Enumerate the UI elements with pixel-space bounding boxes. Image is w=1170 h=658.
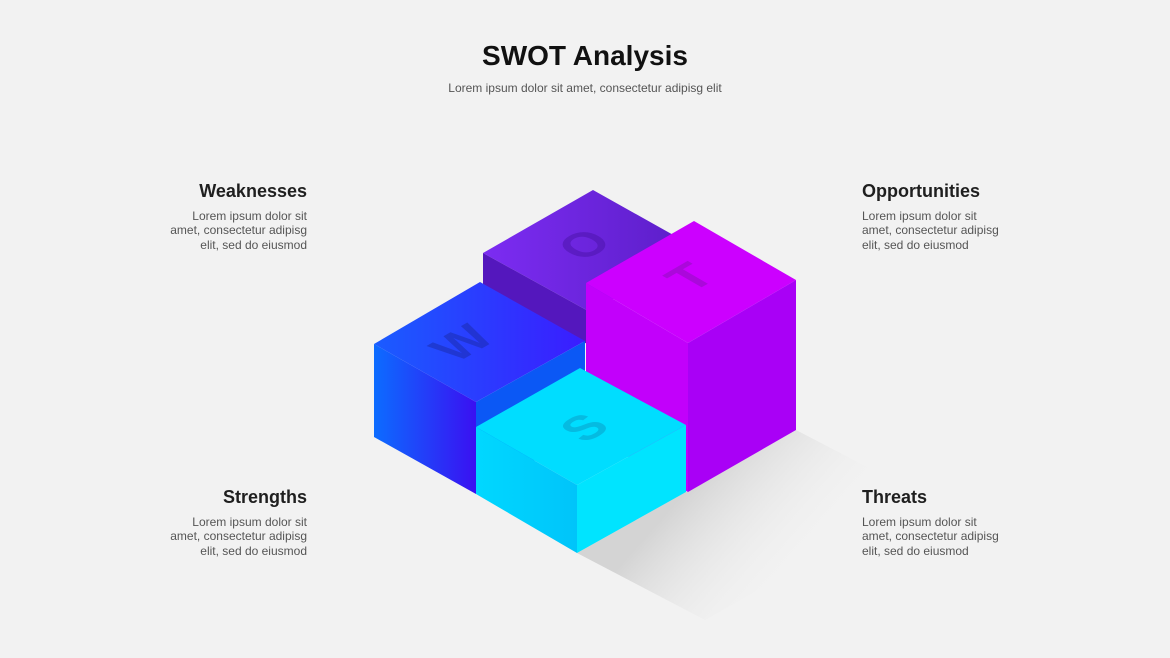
text block: weaknesses: amet, consectetur adipisg <box>170 223 307 237</box>
text block: threats <box>862 487 999 558</box>
text block: opportunities: elit, sed do eiusmod <box>862 238 969 252</box>
text block: weaknesses: Lorem ipsum dolor sit <box>192 209 307 223</box>
block: T <box>586 221 796 492</box>
text block: strengths: amet, consectetur adipisg <box>170 529 307 543</box>
block: O: O <box>546 222 624 268</box>
text block: weaknesses: elit, sed do eiusmod <box>200 238 307 252</box>
text block: strengths: elit, sed do eiusmod <box>200 544 307 558</box>
block: T: T <box>653 255 727 299</box>
title: SWOT Analysis <box>482 40 688 71</box>
text block: strengths: Lorem ipsum dolor sit <box>192 515 307 529</box>
text block: strengths <box>170 487 307 558</box>
text block: opportunities <box>862 181 999 252</box>
block: W: W <box>417 317 507 369</box>
text block: threats: Lorem ipsum dolor sit <box>862 515 977 529</box>
text block: opportunities: amet, consectetur adipisg <box>862 223 999 237</box>
block: S: S <box>548 407 622 449</box>
block: W <box>374 282 585 494</box>
block: S <box>476 368 686 553</box>
text block: threats: Threats <box>862 487 927 507</box>
shadow <box>577 430 925 620</box>
text block: opportunities: Opportunities <box>862 181 980 201</box>
text block: weaknesses <box>170 181 307 252</box>
block: O <box>483 190 700 345</box>
text block: threats: elit, sed do eiusmod <box>862 544 969 558</box>
text block: strengths: Strengths <box>223 487 307 507</box>
subtitle: Lorem ipsum dolor sit amet, consectetur adipisg elit <box>448 81 722 95</box>
text block: opportunities: Lorem ipsum dolor sit <box>862 209 977 223</box>
text block: weaknesses: Weaknesses <box>199 181 307 201</box>
text block: threats: amet, consectetur adipisg <box>862 529 999 543</box>
